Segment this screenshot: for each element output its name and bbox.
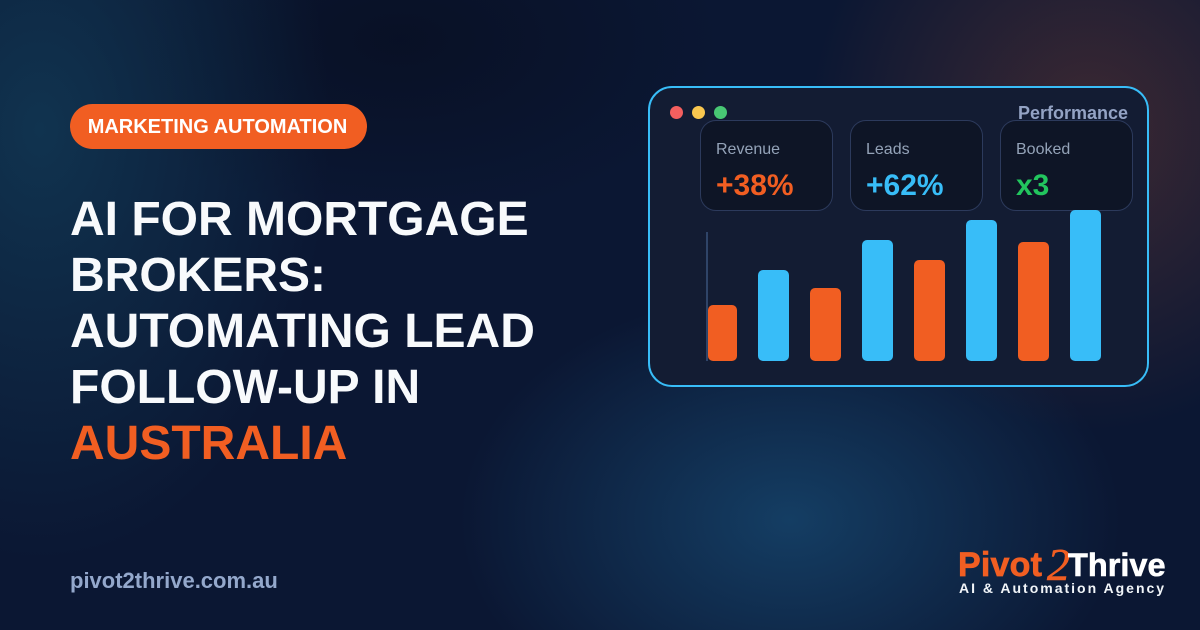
website url: pivot2thrive.com.au	[70, 568, 278, 593]
panel heading: performance: Performance	[1018, 103, 1128, 123]
logo: Pivot2Thrive: 2	[1047, 539, 1070, 590]
title: AUSTRALIA	[70, 417, 347, 470]
logo: Pivot2Thrive: Pivot	[958, 546, 1042, 584]
pill tag: marketing automation	[70, 104, 367, 149]
logo: Pivot2Thrive: Thrive	[1068, 547, 1166, 583]
icon: yellow window dot	[692, 106, 705, 119]
card: leads	[850, 120, 983, 211]
card: leads: Leads	[866, 141, 910, 158]
title	[70, 193, 535, 470]
pill tag: marketing automation: MARKETING AUTOMATION	[88, 116, 347, 138]
card: revenue	[700, 120, 833, 211]
logo: Pivot2Thrive: AI & Automation Agency	[959, 580, 1166, 596]
bar chart	[706, 210, 1101, 361]
logo: Pivot2Thrive	[958, 539, 1166, 596]
card: booked	[1000, 120, 1133, 211]
card: booked: Booked	[1016, 141, 1070, 158]
panel: performance dashboard	[648, 86, 1149, 387]
title: BROKERS:	[70, 249, 326, 302]
card: revenue: Revenue	[716, 141, 780, 158]
icon: green window dot	[714, 106, 727, 119]
card: revenue: +38%	[716, 169, 794, 202]
title: AI FOR MORTGAGE	[70, 193, 529, 246]
title: FOLLOW-UP IN	[70, 361, 420, 414]
card: booked: x3	[1016, 169, 1049, 202]
title: AUTOMATING LEAD	[70, 305, 535, 358]
icon: red window dot	[670, 106, 683, 119]
card: leads: +62%	[866, 169, 944, 202]
